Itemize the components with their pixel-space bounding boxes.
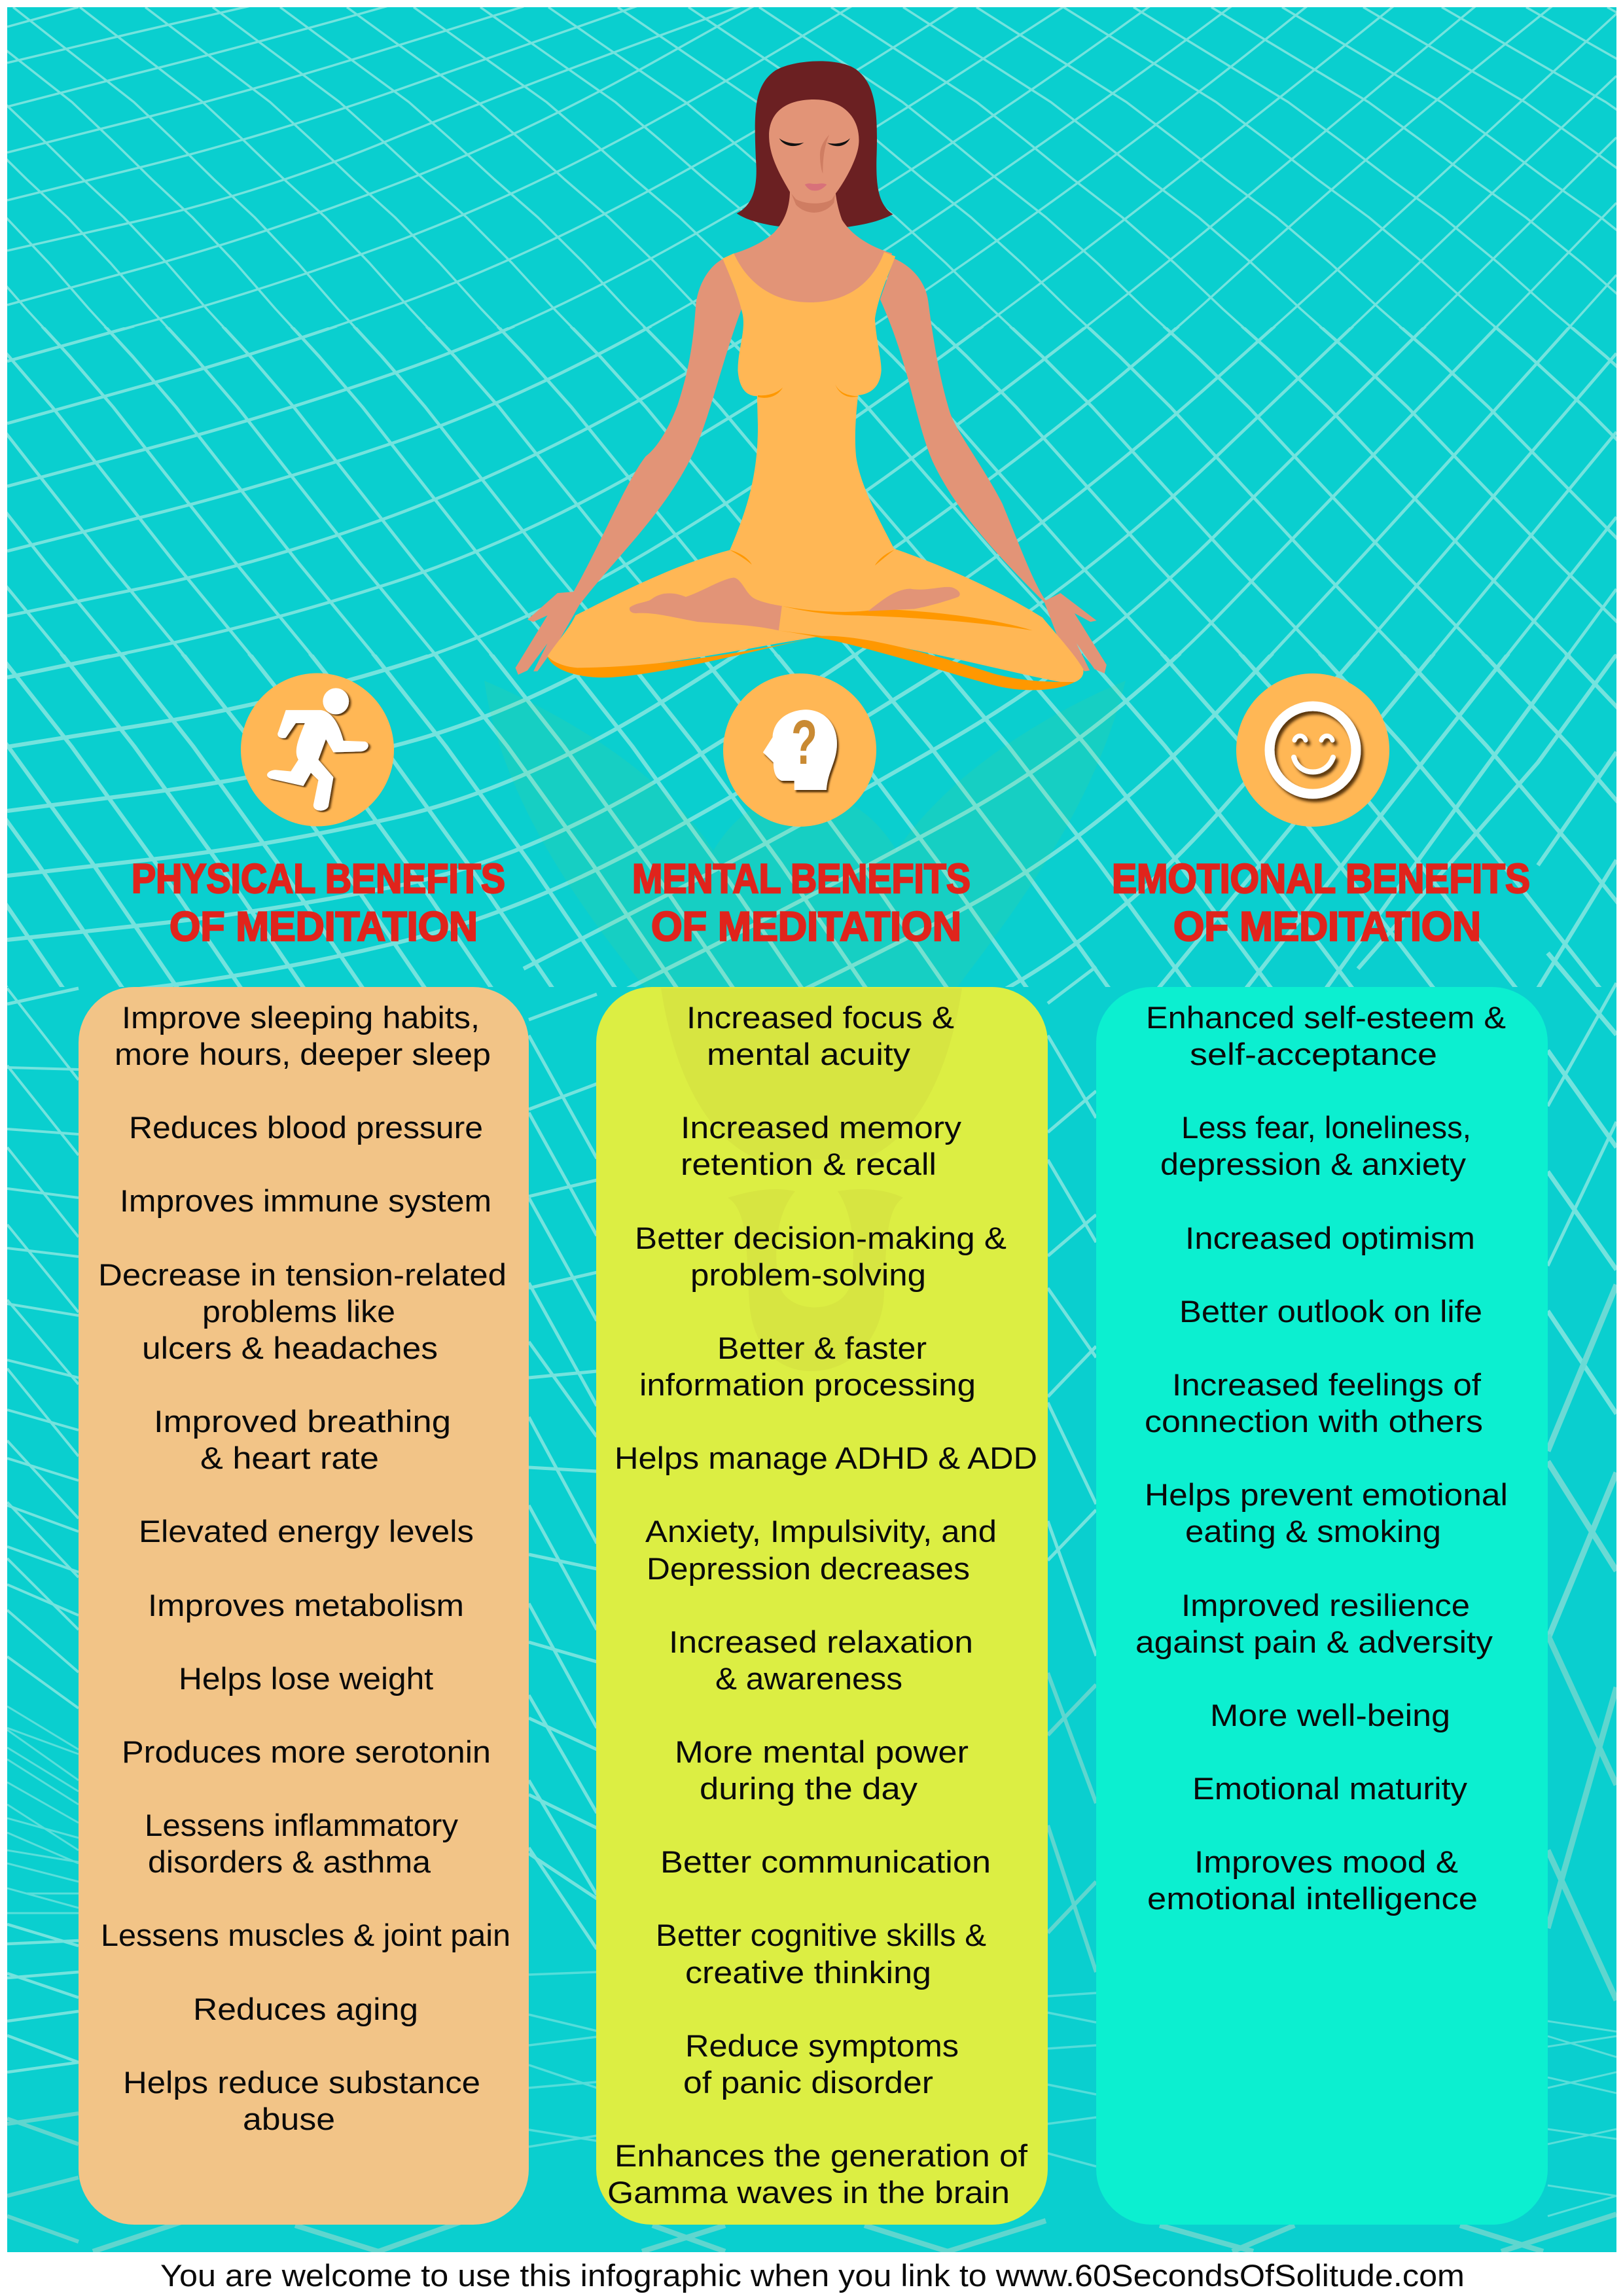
item: tension: problems like	[202, 1294, 395, 1329]
item: connection: Increased feelings of	[1172, 1367, 1482, 1402]
item: memory	[681, 1110, 962, 1181]
panel: emotional benefits	[1096, 987, 1548, 2225]
heading: physical benefits: OF MEDITATION	[169, 904, 478, 950]
heading: mental benefits	[632, 856, 971, 950]
neck shadow	[791, 192, 835, 213]
item: ADHD: Helps manage ADHD & ADD	[615, 1441, 1037, 1475]
item: resilience: Improved resilience	[1181, 1588, 1470, 1623]
item: resilience: against pain & adversity	[1135, 1624, 1493, 1659]
emotional benefits list	[1135, 1000, 1508, 1916]
icon circle: runner	[241, 673, 394, 826]
item: inflammation	[145, 1808, 459, 1879]
item: decisions: problem-solving	[690, 1257, 926, 1292]
panel: physical benefits	[79, 987, 529, 2225]
item: communication: Better communication	[660, 1844, 991, 1879]
item: focus: Increased focus &	[687, 1000, 954, 1035]
item: less fear: depression & anxiety	[1160, 1147, 1467, 1181]
item: serotonin: Produces more serotonin	[122, 1734, 491, 1769]
item: metabolism: Improves metabolism	[148, 1588, 464, 1623]
lotus watermark over mental panel	[661, 988, 962, 1371]
item: breathing: & heart rate	[200, 1441, 379, 1475]
icon circle: smiley	[1236, 673, 1389, 827]
item: eating and smoking: Helps prevent emotional	[1145, 1477, 1508, 1512]
item: mental power: More mental power	[675, 1734, 969, 1769]
item: anxiety	[645, 1514, 997, 1586]
item: cognitive skills	[656, 1918, 986, 1990]
hair	[737, 61, 893, 227]
item: mental power: during the day	[700, 1771, 918, 1806]
item: memory: retention & recall	[681, 1147, 936, 1181]
footer credit: You are welcome to use this infographic when you link to www.60SecondsOfSolitude.com	[160, 2258, 1465, 2293]
item: memory: Increased memory	[681, 1110, 962, 1145]
item: anxiety: Depression decreases	[647, 1551, 970, 1586]
heading: physical benefits	[132, 856, 505, 950]
item: less fear	[1160, 1110, 1471, 1181]
arm: right	[880, 259, 1107, 673]
item: outlook: Better outlook on life	[1179, 1294, 1482, 1329]
item: inflammation: Lessens inflammatory	[145, 1808, 459, 1842]
item: processing	[639, 1331, 976, 1402]
eyes	[779, 138, 850, 146]
foot: right	[868, 587, 960, 611]
item: joint pain: Lessens muscles & joint pain	[101, 1918, 510, 1952]
item: panic: of panic disorder	[683, 2065, 933, 2100]
item: anxiety: Anxiety, Impulsivity, and	[645, 1514, 997, 1549]
item: maturity: Emotional maturity	[1192, 1771, 1468, 1806]
item: eating and smoking	[1145, 1477, 1508, 1549]
item: panic: Reduce symptoms	[685, 2028, 959, 2063]
item: eating and smoking: eating & smoking	[1185, 1514, 1441, 1549]
item: breathing	[154, 1404, 451, 1475]
dress shading	[548, 384, 1075, 690]
item: less fear: Less fear, loneliness,	[1181, 1110, 1471, 1145]
arm: left	[516, 259, 742, 675]
item: tension: ulcers & headaches	[142, 1331, 438, 1365]
panel: mental benefits	[596, 987, 1048, 2225]
item: substance abuse	[123, 2065, 480, 2136]
item: substance abuse: Helps reduce substance	[123, 2065, 480, 2100]
nose	[820, 135, 829, 173]
item: substance abuse: abuse	[243, 2102, 335, 2136]
item: focus	[687, 1000, 954, 1071]
item: gamma waves: Gamma waves in the brain	[607, 2175, 1010, 2210]
item: decisions: Better decision-making &	[635, 1221, 1007, 1255]
heading: emotional benefits: OF MEDITATION	[1173, 904, 1481, 950]
neck and chest	[732, 190, 892, 306]
item: gamma waves	[607, 2138, 1028, 2210]
item: connection: connection with others	[1145, 1404, 1483, 1439]
lips	[805, 183, 827, 190]
item: sleep: Improve sleeping habits,	[122, 1000, 480, 1035]
heading: emotional benefits: EMOTIONAL BENEFITS	[1112, 856, 1530, 902]
item: self-esteem: Enhanced self-esteem &	[1146, 1000, 1506, 1035]
item: relaxation: Increased relaxation	[669, 1624, 973, 1659]
item: mood: Improves mood &	[1194, 1844, 1458, 1879]
item: mental power	[675, 1734, 969, 1806]
dress	[548, 252, 1083, 683]
item: well-being: More well-being	[1210, 1698, 1450, 1732]
item: optimism: Increased optimism	[1185, 1221, 1475, 1255]
item: cognitive skills: Better cognitive skills &	[656, 1918, 986, 1952]
item: focus: mental acuity	[707, 1037, 911, 1071]
item: inflammation: disorders & asthma	[148, 1844, 431, 1879]
physical benefits list	[98, 1000, 510, 2136]
face	[769, 99, 859, 204]
heading: emotional benefits	[1112, 856, 1530, 950]
item: decisions	[635, 1221, 1007, 1292]
item: tension	[98, 1257, 507, 1365]
item: relaxation: & awareness	[715, 1661, 902, 1696]
foot: left	[630, 577, 782, 630]
figure: meditating woman	[516, 61, 1107, 690]
item: blood pressure: Reduces blood pressure	[129, 1110, 483, 1145]
item: mood: emotional intelligence	[1147, 1881, 1478, 1916]
item: breathing: Improved breathing	[154, 1404, 451, 1439]
heading: physical benefits: PHYSICAL BENEFITS	[132, 856, 505, 902]
heading: mental benefits: MENTAL BENEFITS	[632, 856, 971, 902]
heading: mental benefits: OF MEDITATION	[651, 904, 961, 950]
mental benefits list	[607, 1000, 1037, 2210]
item: tension: Decrease in tension-related	[98, 1257, 507, 1292]
faint lotus watermark behind the figure	[484, 681, 1126, 1165]
item: aging: Reduces aging	[193, 1992, 418, 2026]
item: energy: Elevated energy levels	[139, 1514, 474, 1549]
item: connection	[1145, 1367, 1483, 1439]
item: immune system: Improves immune system	[120, 1183, 491, 1218]
item: panic	[683, 2028, 959, 2100]
item: resilience	[1135, 1588, 1493, 1659]
icon circle: head with question mark	[723, 673, 876, 827]
item: sleep: more hours, deeper sleep	[115, 1037, 491, 1071]
icon circle: head with question mark: ?	[791, 708, 817, 778]
item: self-esteem	[1146, 1000, 1506, 1071]
item: processing: Better & faster	[717, 1331, 927, 1365]
item: mood	[1147, 1844, 1478, 1916]
item: processing: information processing	[639, 1367, 976, 1402]
item: weight: Helps lose weight	[179, 1661, 433, 1696]
item: gamma waves: Enhances the generation of	[615, 2138, 1028, 2173]
item: relaxation	[669, 1624, 973, 1696]
item: self-esteem: self-acceptance	[1190, 1037, 1437, 1071]
item: cognitive skills: creative thinking	[685, 1955, 931, 1990]
item: sleep	[115, 1000, 491, 1071]
